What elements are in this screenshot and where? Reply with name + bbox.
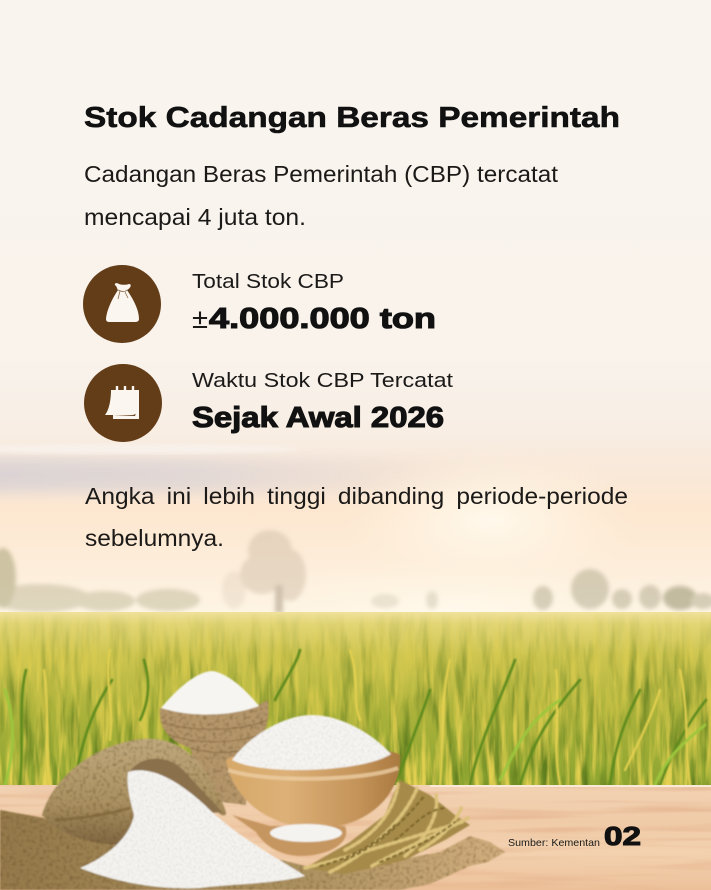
- icon: rice sack: [83, 265, 161, 343]
- bowl of rice: [226, 715, 400, 828]
- source note: Sumber: Kementan: [508, 837, 600, 849]
- wooden spoon: [232, 815, 346, 856]
- page number: 02: [604, 821, 641, 851]
- intro text: Cadangan Beras Pemerintah (CBP) tercatat: [84, 161, 559, 187]
- background: sky: [0, 0, 711, 667]
- stat: total stock: Total Stok CBP: [192, 271, 344, 293]
- burlap cloth: [0, 805, 510, 890]
- intro text: mencapai 4 juta ton.: [84, 204, 306, 230]
- background: wooden table: [0, 785, 711, 890]
- closing text: sebelumnya.: [85, 525, 224, 551]
- stat: total stock: ±: [192, 303, 208, 334]
- intro text: [84, 161, 559, 230]
- stat: recording time: Waktu Stok CBP Tercatat: [192, 370, 454, 392]
- stat: total stock: [192, 271, 436, 335]
- back sack of rice: [159, 670, 269, 806]
- front burlap sack: [40, 735, 230, 847]
- spilled rice pile: [78, 765, 308, 890]
- icon: calendar: [84, 364, 162, 442]
- background: horizon trees: [0, 530, 711, 613]
- rice stalks: [305, 780, 470, 874]
- stat: recording time: Sejak Awal 2026: [192, 402, 444, 434]
- stat: recording time: [192, 370, 454, 434]
- stat: total stock: 4.000.000 ton: [209, 303, 436, 335]
- closing text: [85, 483, 628, 551]
- illustration: rice still life: [0, 671, 510, 890]
- closing text: Angka ini lebih tinggi dibanding periode-periode: [85, 483, 628, 509]
- title: Stok Cadangan Beras Pemerintah: [84, 102, 620, 134]
- background: rice field: [0, 612, 711, 786]
